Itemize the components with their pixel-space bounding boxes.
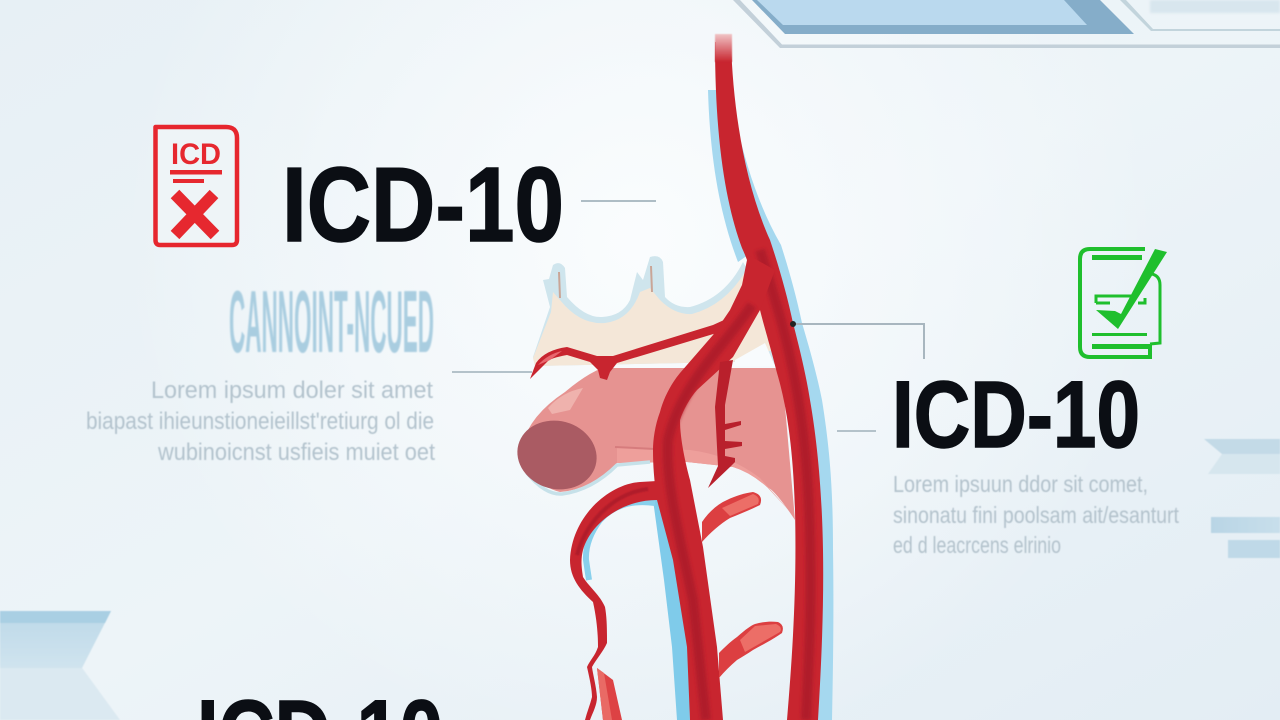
icon: green book with check mark [1080,249,1167,357]
leader line: right heading lower [837,430,876,432]
leader line: top left heading [581,200,656,202]
branching artery [653,255,775,720]
decorative panel: top right [733,0,1280,48]
leader line with elbow: right heading [792,324,924,359]
text block: right description: ed d leacrcens elrinio [893,532,1061,558]
text block: left description [86,377,435,466]
text block: right description: Lorem ipsuun ddor sit comet, [893,471,1148,497]
text block: left description: Lorem ipsum doler sit amet [151,377,433,404]
hook artery [570,481,657,720]
salmon branch stubs [597,492,783,720]
icon: ICD document with red cross [156,127,237,245]
heading: ICD-10 right: ICD-10 [892,362,1140,468]
leader dot [790,321,796,327]
pale cream tissue [533,256,775,366]
text: CANNOINT-NCUED [229,272,434,371]
leader line: left description [452,371,532,373]
small artery to left [530,315,735,380]
heading: ICD-10 top left: ICD-10 [282,146,564,264]
anatomy illustration: arteries [510,34,833,720]
text block: left description: wubinoicnst usfieis muiet oet [157,439,435,466]
decorative panel: right side stack [1204,439,1280,558]
text block: right description: sinonatu fini poolsam ait/esanturt [893,502,1180,528]
pink tube (vessel) [510,368,795,520]
icon: ICD document with red cross: ICD [171,138,221,171]
descending branch with twigs [708,360,742,488]
blue outlines [586,90,833,720]
main artery [715,34,823,720]
text block: left description: biapast ihieunstioneieillst'retiurg ol die [86,408,434,435]
text block: right description [893,471,1180,558]
decorative panel: bottom left [0,611,120,720]
